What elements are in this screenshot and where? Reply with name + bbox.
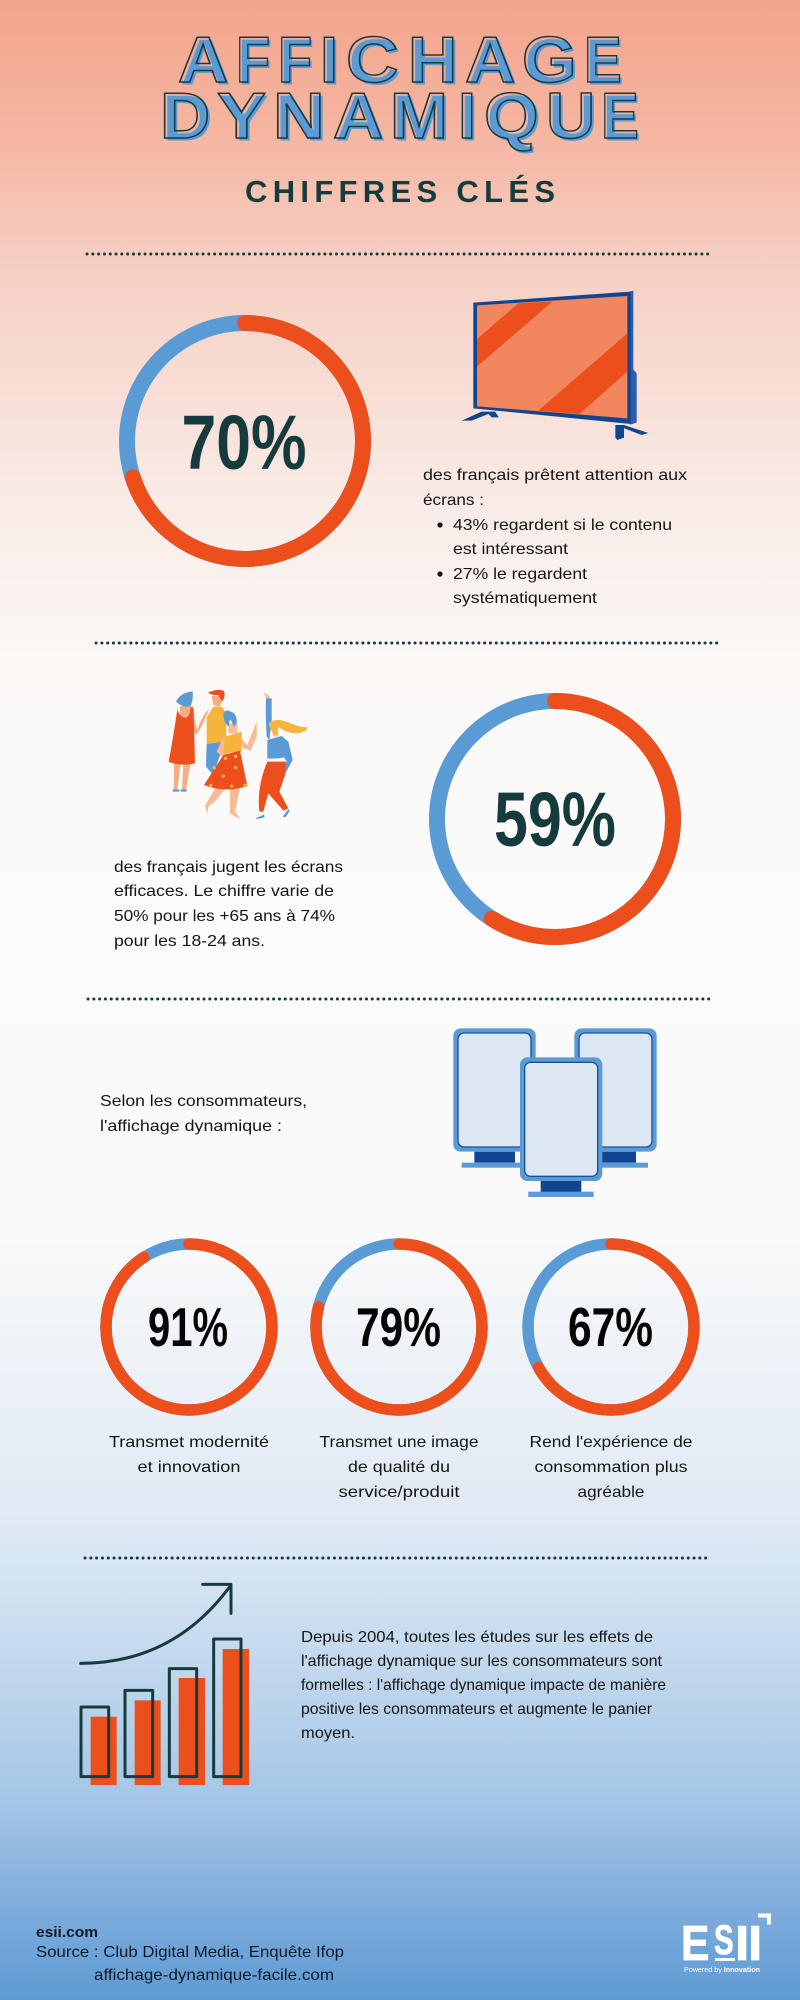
title — [164, 36, 639, 154]
icon: growth bar chart with arrow — [81, 1584, 249, 1785]
donut chart: 79% — [316, 1244, 482, 1410]
donut chart: 67%: 67% — [568, 1296, 653, 1358]
logo: ESII: E — [681, 1916, 709, 1970]
donut chart: 79%: 79% — [356, 1296, 441, 1358]
text: selon les consommateurs — [100, 1093, 307, 1135]
footer: sources — [36, 1924, 344, 1984]
logo corner and tagline — [684, 1914, 771, 1974]
donut chart: 67% — [528, 1244, 694, 1410]
caption: 91%: et innovation — [138, 1459, 240, 1476]
person 2 — [206, 690, 227, 775]
donut chart: 70%: 70% — [182, 400, 306, 486]
person 1 — [169, 691, 209, 792]
subtitle: CHIFFRES CLÉS — [245, 174, 555, 209]
icon: three digital displays — [453, 1028, 657, 1197]
text: conclusion paragraph: l'affichage dynamique sur les consommateurs sont — [301, 1653, 663, 1670]
logo: ESII — [681, 1916, 762, 1970]
logo: ESII: S — [714, 1916, 733, 1963]
text: attention aux écrans: des français prêtent attention aux — [423, 467, 687, 484]
text: conclusion paragraph: Depuis 2004, toutes les études sur les effets de — [301, 1629, 653, 1646]
footer: sources: esii.com — [36, 1924, 98, 1941]
donut chart: 59%: 59% — [494, 777, 616, 863]
text: conclusion paragraph: formelles : l'affichage dynamique impacte de manière — [301, 1677, 666, 1694]
caption: 79%: de qualité du — [348, 1459, 450, 1476]
donut chart: 91%: 91% — [148, 1296, 228, 1358]
donut chart: 91% — [106, 1244, 272, 1410]
caption: 67%: Rend l'expérience de — [530, 1434, 693, 1451]
donut chart: 59% — [437, 701, 673, 937]
caption: 67% — [530, 1434, 693, 1501]
text: selon les consommateurs: l'affichage dynamique : — [100, 1118, 282, 1135]
text: écrans efficaces: efficaces. Le chiffre varie de — [114, 883, 334, 900]
caption: 79%: service/produit — [338, 1484, 460, 1501]
text: attention aux écrans: 43% regardent si le contenu — [453, 517, 672, 534]
icon: television — [462, 291, 648, 440]
text: conclusion paragraph: moyen. — [301, 1725, 355, 1742]
text: selon les consommateurs: Selon les consommateurs, — [100, 1093, 307, 1110]
text: écrans efficaces: pour les 18-24 ans. — [114, 933, 265, 950]
logo corner and tagline: Powered by Innovation — [684, 1967, 760, 1974]
text: conclusion paragraph — [301, 1629, 666, 1742]
caption: 91% — [109, 1434, 269, 1476]
logo: ESII: I — [748, 1916, 762, 1970]
text: attention aux écrans — [423, 467, 687, 607]
person 4 — [256, 692, 308, 819]
caption: 79% — [320, 1434, 479, 1501]
text: écrans efficaces — [114, 859, 343, 950]
caption: 67%: agréable — [578, 1484, 645, 1501]
text: écrans efficaces: 50% pour les +65 ans à 74% — [114, 908, 335, 925]
footer: sources: Source : Club Digital Media, Enquête Ifop — [36, 1944, 344, 1961]
footer: sources: affichage-dynamique-facile.com — [94, 1967, 334, 1984]
illustration: people dancing — [169, 690, 308, 819]
text: attention aux écrans: est intéressant — [453, 541, 569, 558]
caption: 79%: Transmet une image — [320, 1434, 479, 1451]
text: conclusion paragraph: positive les consommateurs et augmente le panier — [301, 1701, 653, 1718]
text: attention aux écrans: systématiquement — [453, 590, 598, 607]
text: attention aux écrans: 27% le regardent — [453, 566, 588, 583]
text: attention aux écrans: écrans : — [423, 492, 484, 509]
caption: 91%: Transmet modernité — [109, 1434, 269, 1451]
caption: 67%: consommation plus — [534, 1459, 688, 1476]
logo: ESII: I — [735, 1916, 749, 1970]
text: écrans efficaces: des français jugent les écrans — [114, 859, 343, 876]
donut chart: 70% — [127, 323, 363, 559]
person 3 — [204, 710, 257, 819]
